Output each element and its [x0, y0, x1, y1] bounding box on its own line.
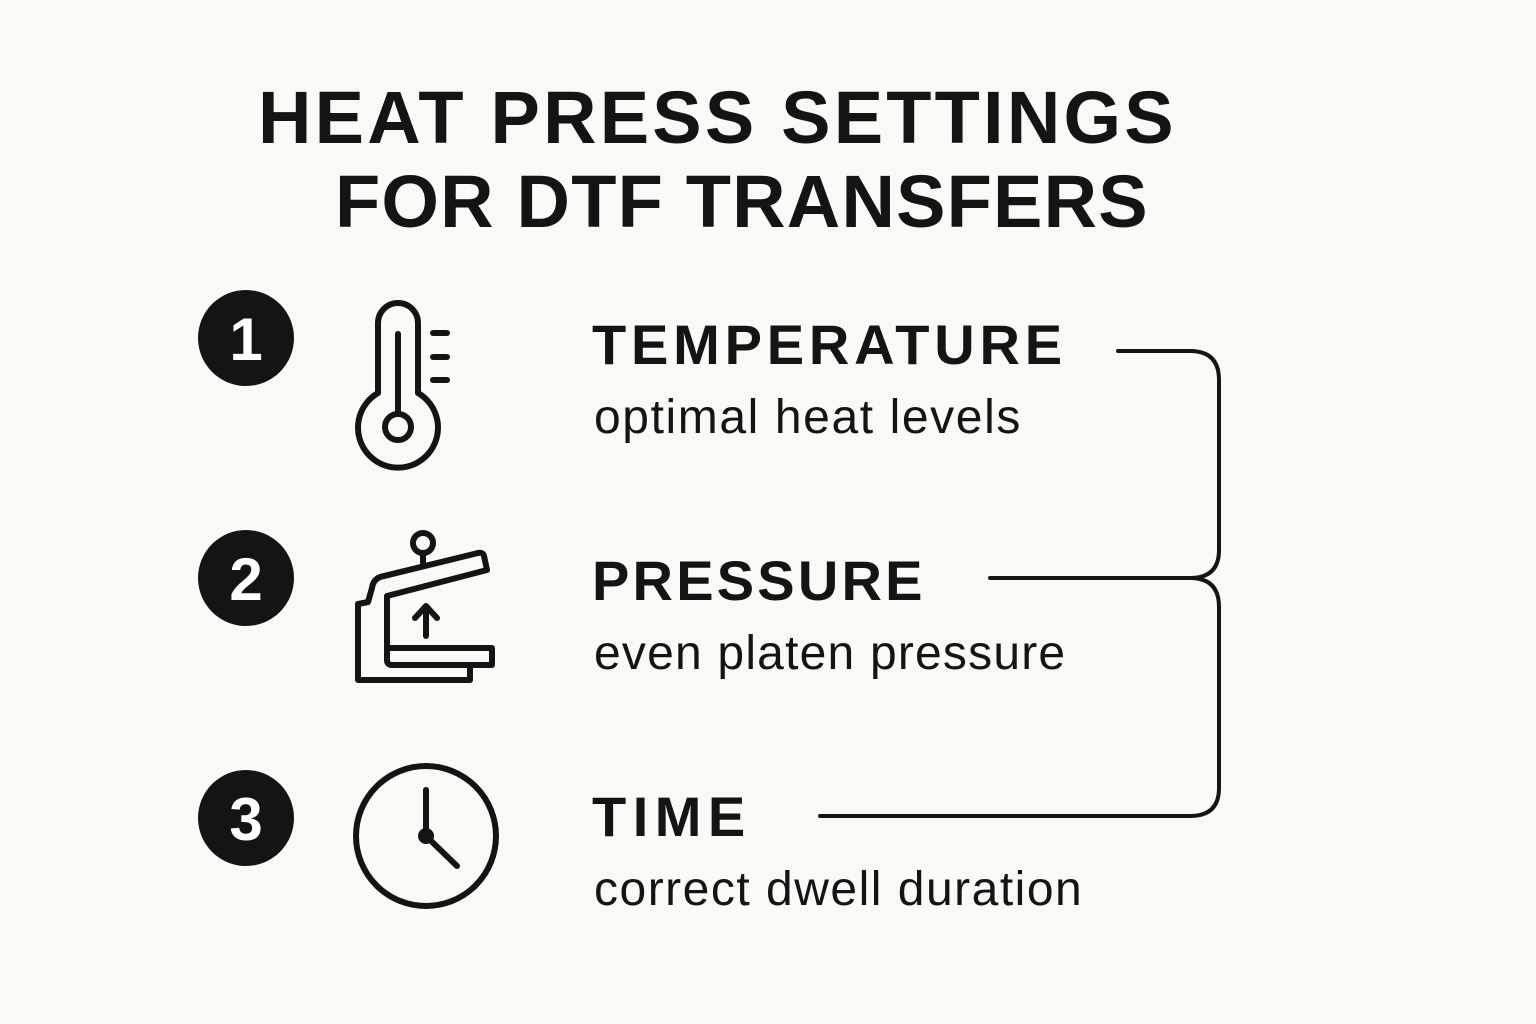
icon: thermometer: [358, 303, 447, 468]
bracket connector: [820, 351, 1219, 816]
text: time sub: correct dwell duration: [594, 863, 1083, 916]
heading: temperature: TEMPERATURE: [592, 313, 1067, 376]
text: pressure sub: even platen pressure: [594, 627, 1066, 680]
badge 3: 3: [229, 786, 263, 853]
badge 1: 1: [229, 306, 263, 373]
title: HEAT PRESS SETTINGS: [258, 76, 1177, 159]
badge 3: [198, 770, 294, 866]
icon: clock: [356, 766, 496, 906]
badge 2: 2: [229, 546, 263, 613]
text: temperature sub: optimal heat levels: [594, 391, 1022, 444]
heading: time: TIME: [592, 785, 752, 848]
icon: heat press: [358, 533, 492, 680]
heading: pressure: PRESSURE: [592, 549, 926, 612]
title: [258, 76, 1177, 243]
badge 2: [198, 530, 294, 626]
badge 1: [198, 290, 294, 386]
title: FOR DTF TRANSFERS: [335, 160, 1149, 243]
